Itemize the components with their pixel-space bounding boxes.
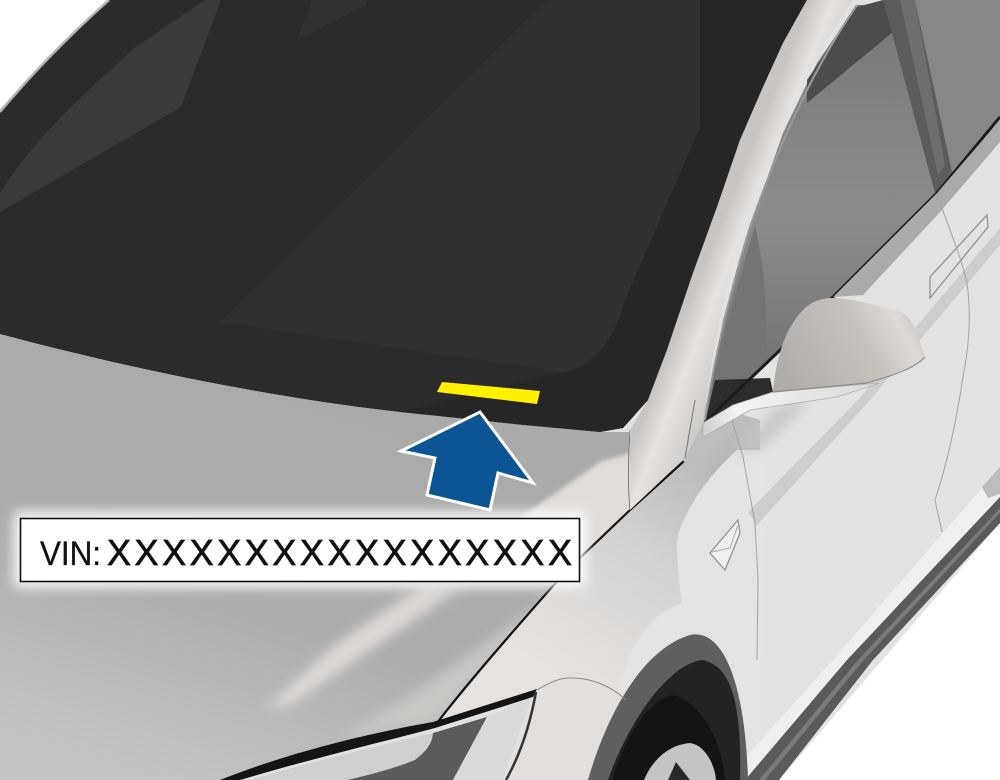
door seams — [732, 195, 969, 660]
windshield — [0, 0, 807, 432]
VIN prefix text: VIN: — [40, 535, 101, 573]
VIN label box — [14, 512, 586, 587]
side repeater tab — [710, 520, 740, 570]
hood — [0, 334, 640, 780]
VIN placeholder text: XXXXXXXXXXXXXXXXX — [107, 532, 572, 573]
headlight — [220, 678, 626, 780]
A-pillar — [630, 0, 857, 510]
side mirror — [703, 298, 925, 437]
rocker panel — [725, 467, 1000, 780]
hood and fender seams — [437, 430, 683, 723]
side window — [705, 0, 1000, 423]
front fender — [437, 400, 765, 780]
door handle — [930, 215, 988, 298]
front wheel — [588, 634, 748, 780]
door shoulder band — [735, 120, 1000, 525]
yellow VIN plate marker — [437, 382, 540, 404]
tinted glass area — [221, 0, 700, 372]
blue arrow pointing to VIN plate — [401, 412, 533, 510]
